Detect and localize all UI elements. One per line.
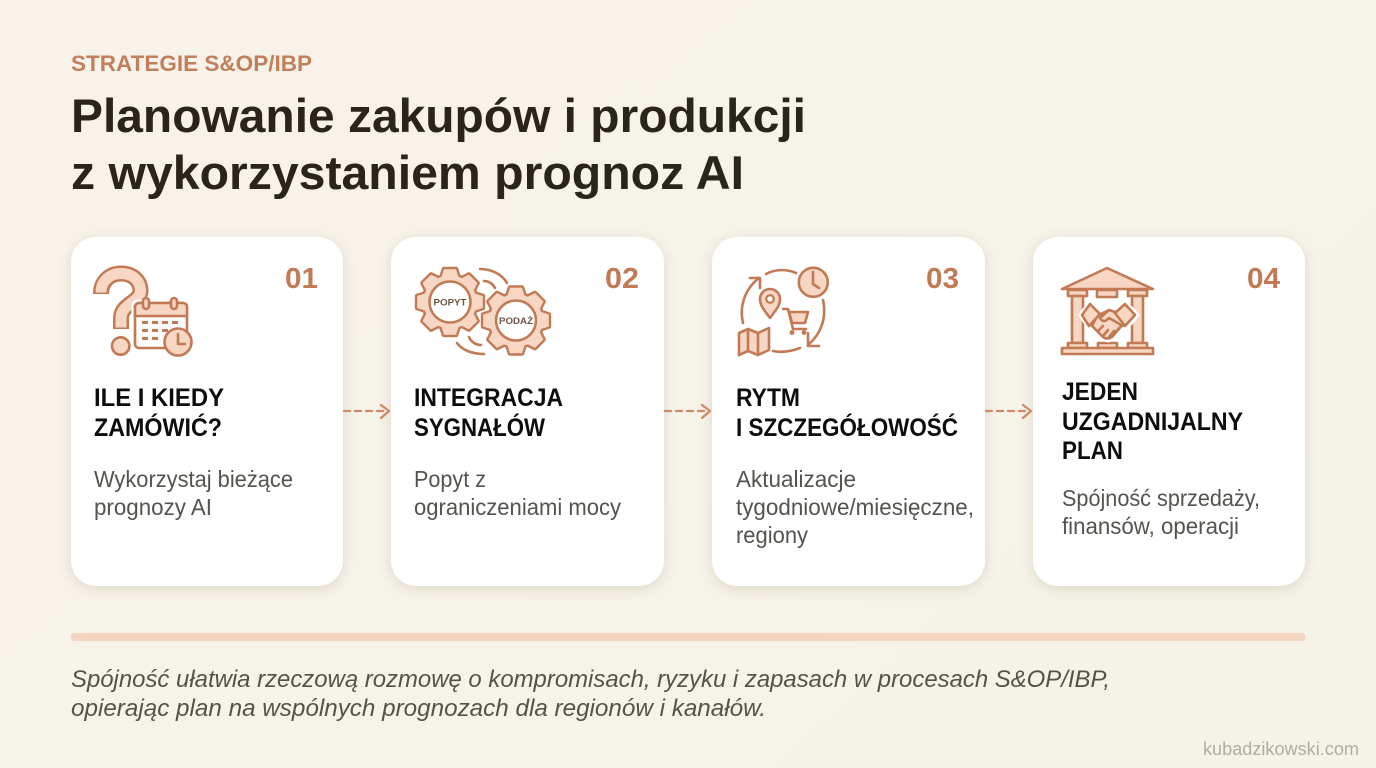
description: finansów, operacji	[1062, 513, 1239, 539]
arrow: step 3 to 4	[986, 405, 1031, 418]
description: regiony	[736, 522, 808, 548]
summary text	[71, 666, 1110, 722]
heading	[94, 384, 224, 442]
divider bar	[71, 633, 1305, 641]
title	[71, 89, 806, 199]
heading: SYGNAŁÓW	[414, 412, 545, 442]
description: prognozy AI	[94, 494, 212, 520]
number 04: 04	[1247, 263, 1280, 295]
panel: step 02	[391, 237, 664, 586]
description	[1062, 485, 1260, 539]
arrow: step 1 to 2	[344, 405, 389, 418]
icon: gears	[417, 269, 549, 354]
description: ograniczeniami mocy	[414, 494, 621, 520]
heading: I SZCZEGÓŁOWOŚĆ	[736, 412, 958, 442]
heading	[1062, 378, 1243, 465]
description: Popyt z	[414, 466, 486, 492]
eyebrow label: STRATEGIE S&OP/IBP	[71, 51, 312, 76]
description: Wykorzystaj bieżące	[94, 466, 293, 492]
description	[736, 466, 974, 548]
icon: gears: POPYT	[434, 298, 467, 308]
heading: JEDEN	[1062, 378, 1138, 406]
description	[414, 466, 621, 520]
number 03: 03	[926, 263, 959, 295]
heading: UZGADNIJALNY	[1062, 408, 1243, 436]
panel: step 04	[1033, 237, 1305, 586]
description: tygodniowe/miesięczne,	[736, 494, 974, 520]
heading: RYTM	[736, 384, 800, 412]
summary text: Spójność ułatwia rzeczową rozmowę o kompromisach, ryzyku i zapasach w procesach S&OP/IBP,	[71, 666, 1110, 693]
panel: step 03	[712, 237, 985, 586]
heading: ZAMÓWIĆ?	[94, 412, 222, 442]
watermark: kubadzikowski.com	[1203, 739, 1359, 759]
description	[94, 466, 293, 520]
icon: question mark and calendar	[101, 274, 192, 356]
number 02: 02	[605, 263, 639, 295]
heading: ILE I KIEDY	[94, 384, 224, 412]
description: Spójność sprzedaży,	[1062, 485, 1260, 511]
title: Planowanie zakupów i produkcji	[71, 89, 806, 142]
icon: cycle with map, pin, cart and clock	[739, 268, 828, 355]
heading: INTEGRACJA	[414, 384, 563, 412]
icon: gears: PODAŻ	[499, 316, 533, 327]
arrow: step 2 to 3	[665, 405, 710, 418]
icon: temple with handshake	[1062, 268, 1153, 354]
heading	[414, 384, 563, 442]
heading	[736, 384, 958, 442]
heading: PLAN	[1062, 437, 1123, 465]
panel: step 01	[71, 237, 343, 586]
title: z wykorzystaniem prognoz AI	[71, 146, 744, 199]
summary text: opierając plan na wspólnych prognozach dla regionów i kanałów.	[71, 695, 766, 722]
description: Aktualizacje	[736, 466, 856, 492]
number 01: 01	[285, 263, 318, 295]
